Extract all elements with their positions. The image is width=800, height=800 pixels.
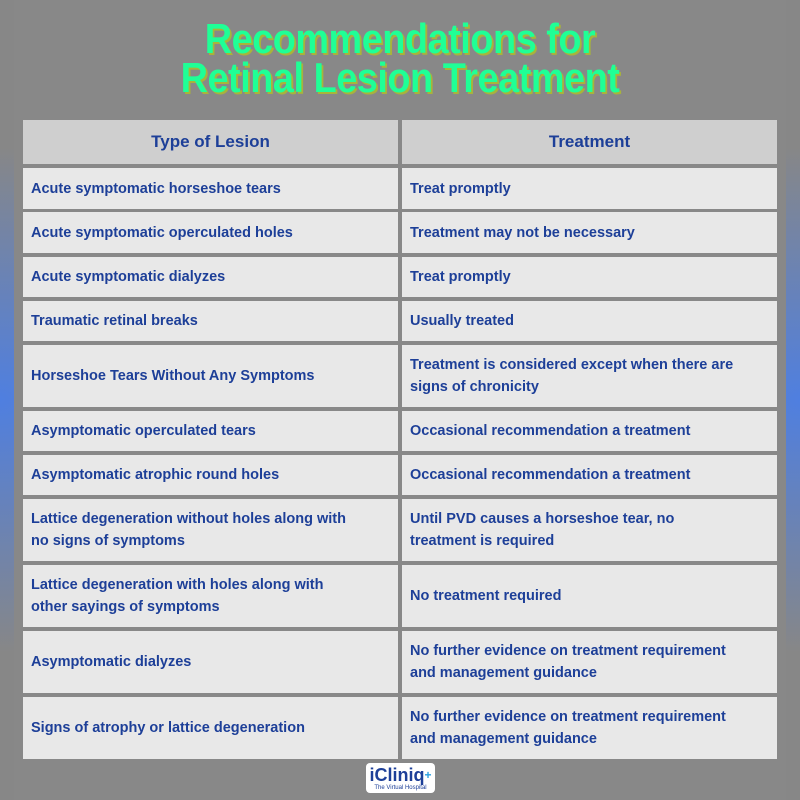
logo: The Virtual Hospital — [374, 785, 427, 791]
table: Traumatic retinal breaks — [31, 313, 198, 329]
table: Treatment may not be necessary — [410, 224, 635, 240]
table: Lattice degeneration with holes along with — [31, 577, 323, 593]
table: No further evidence on treatment requirement — [410, 709, 726, 725]
table: No further evidence on treatment requirement — [410, 643, 726, 659]
table: and management guidance — [410, 665, 597, 681]
table: Usually treated — [410, 313, 514, 329]
table: No treatment required — [410, 588, 561, 604]
table: Asymptomatic operculated tears — [31, 423, 256, 439]
title: Retinal Lesion Treatment — [181, 54, 619, 101]
title: Recommendations for — [205, 15, 595, 62]
table: Acute symptomatic horseshoe tears — [31, 180, 281, 196]
logo — [366, 763, 435, 793]
table: Treat promptly — [410, 269, 511, 285]
table: Until PVD causes a horseshoe tear, no — [410, 511, 674, 527]
table: Asymptomatic atrophic round holes — [31, 467, 279, 483]
header: type of lesion: Type of Lesion — [151, 132, 270, 151]
title — [181, 15, 622, 101]
logo: iCliniq+ — [369, 765, 432, 785]
table: Occasional recommendation a treatment — [410, 467, 690, 483]
header: treatment — [402, 120, 777, 164]
table: Treat promptly — [410, 180, 511, 196]
table — [23, 120, 777, 759]
header: type of lesion — [23, 120, 398, 164]
table: and management guidance — [410, 731, 597, 747]
table: other sayings of symptoms — [31, 599, 220, 615]
table: signs of chronicity — [410, 379, 539, 395]
header: treatment: Treatment — [549, 132, 630, 151]
table: Occasional recommendation a treatment — [410, 423, 690, 439]
table: Horseshoe Tears Without Any Symptoms — [31, 368, 314, 384]
table: treatment is required — [410, 533, 554, 549]
table: Acute symptomatic dialyzes — [31, 269, 225, 285]
table: Lattice degeneration without holes along with — [31, 511, 346, 527]
table: Treatment is considered except when there are — [410, 357, 733, 373]
table: Acute symptomatic operculated holes — [31, 224, 293, 240]
table: Asymptomatic dialyzes — [31, 654, 191, 670]
table: Signs of atrophy or lattice degeneration — [31, 720, 305, 736]
table: no signs of symptoms — [31, 533, 185, 549]
